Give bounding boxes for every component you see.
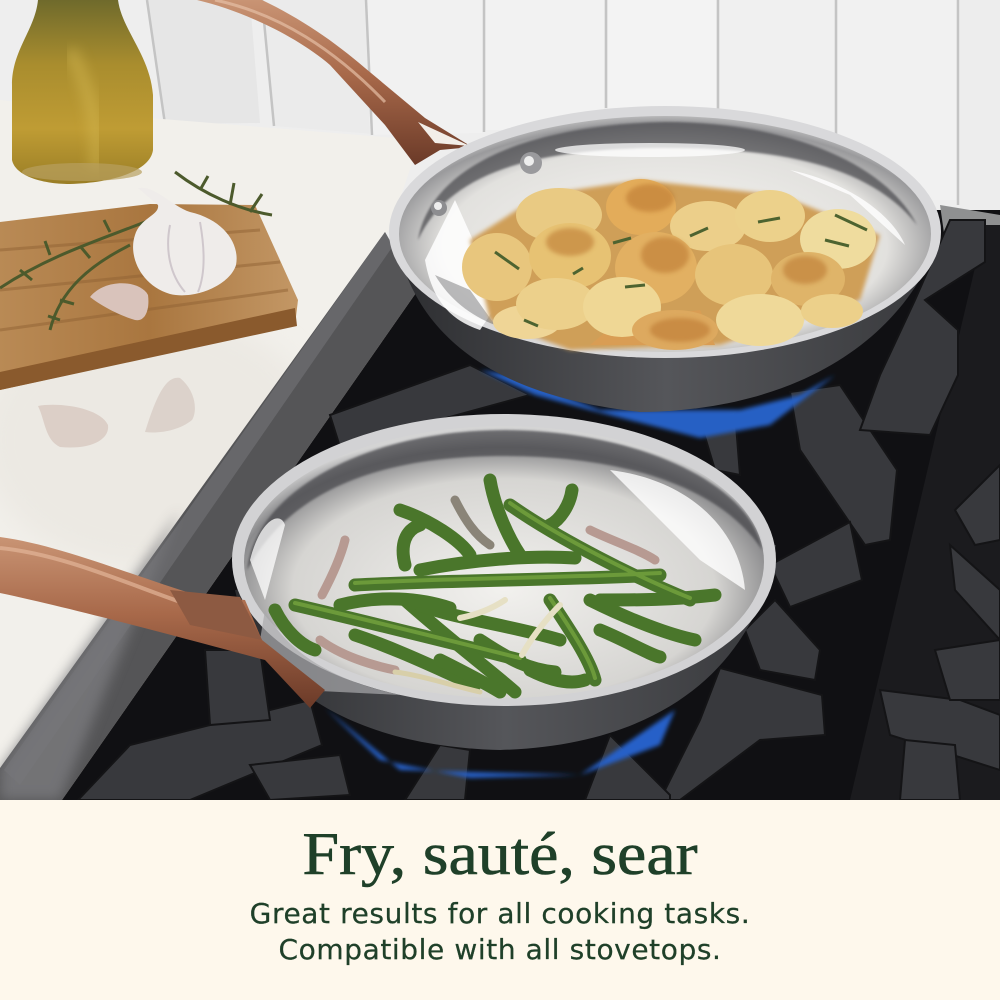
subtext: Compatible with all stovetops. [278,933,722,966]
blue flames [325,370,835,778]
stove black top [62,210,1000,800]
front pan handle [0,537,325,708]
back pan [389,106,941,412]
counter [0,100,420,770]
oil bottle [12,0,153,184]
grates [78,220,1000,800]
caption banner [0,800,1000,1000]
stove steel edge [0,232,418,800]
back pan handle [197,0,472,165]
cutting board [0,204,298,390]
rosemary [0,172,272,330]
subtext: Great results for all cooking tasks. [250,897,750,930]
food: roasted potatoes [462,179,880,350]
heading: Fry, sauté, sear [302,821,698,887]
front pan [232,414,776,750]
garlic cloves [38,283,195,448]
food: green beans [275,480,715,692]
garlic bulb [133,188,237,295]
subtext [250,897,750,966]
photo: two pans on a gas stove [0,0,1000,800]
tile wall [0,0,1000,240]
